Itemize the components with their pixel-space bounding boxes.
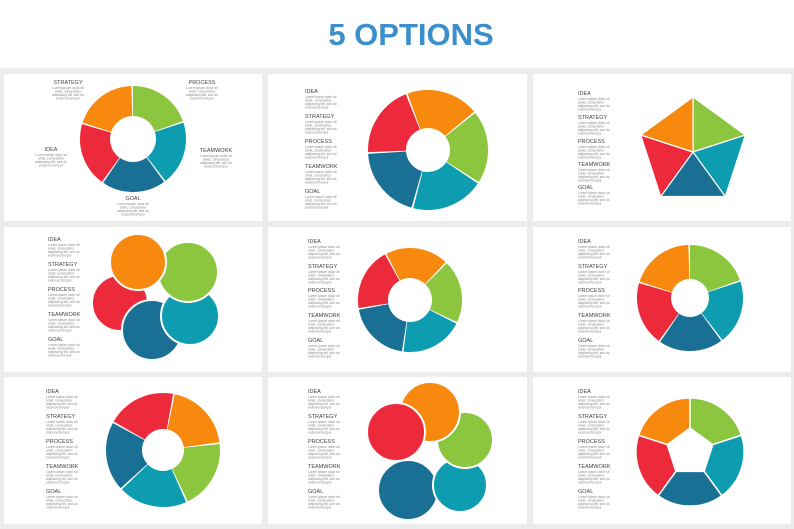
labels r3c2: Lorem ipsum dolor sit	[308, 395, 340, 399]
labels r2c1: Lorem ipsum dolor sit	[48, 318, 80, 322]
labels r3c2: adipiscing elit, sed do	[308, 402, 340, 406]
labels r1c2: eiusmod tempor	[305, 130, 330, 134]
labels r3c2	[308, 389, 341, 510]
labels r1c1: eiusmod tempor	[190, 96, 215, 100]
labels r1c3: Lorem ipsum dolor sit	[578, 145, 610, 149]
labels r1c2: Lorem ipsum dolor sit	[305, 145, 337, 149]
labels r2c1: eiusmod tempor	[48, 354, 73, 358]
labels r3c3: adipiscing elit, sed do	[578, 452, 610, 456]
labels r3c3: GOAL	[578, 489, 593, 495]
labels r3c2: IDEA	[308, 389, 321, 395]
labels r1c2: Lorem ipsum dolor sit	[305, 195, 337, 199]
labels r1c1	[35, 80, 233, 216]
labels r1c3: GOAL	[578, 185, 593, 191]
labels r2c2: eiusmod tempor	[308, 354, 333, 358]
labels r2c3: eiusmod tempor	[578, 304, 603, 308]
labels r1c1: Lorem ipsum dolor sit	[186, 86, 218, 90]
labels r2c1: amet, consectetur	[48, 296, 75, 300]
labels r3c1: eiusmod tempor	[46, 456, 71, 460]
labels r2c2: eiusmod tempor	[308, 280, 333, 284]
labels r3c1: amet, consectetur	[46, 398, 73, 402]
labels r3c3: TEAMWORK	[578, 464, 611, 470]
labels r3c2: adipiscing elit, sed do	[308, 502, 340, 506]
labels r2c3: IDEA	[578, 239, 591, 245]
labels r3c3: eiusmod tempor	[578, 406, 603, 410]
labels r2c1: eiusmod tempor	[48, 254, 73, 258]
labels r1c2: amet, consectetur	[305, 124, 332, 128]
labels r2c3: TEAMWORK	[578, 313, 611, 319]
labels r1c3: amet, consectetur	[578, 148, 605, 152]
labels r2c2: amet, consectetur	[308, 298, 335, 302]
labels r1c3: STRATEGY	[578, 115, 608, 121]
labels r3c1: eiusmod tempor	[46, 480, 71, 484]
labels r2c3: PROCESS	[578, 288, 605, 294]
labels r3c1: PROCESS	[46, 439, 73, 445]
labels r3c2: eiusmod tempor	[308, 430, 333, 434]
labels r2c3: adipiscing elit, sed do	[578, 326, 610, 330]
labels r2c3: eiusmod tempor	[578, 354, 603, 358]
labels r2c1: amet, consectetur	[48, 346, 75, 350]
labels r2c3: amet, consectetur	[578, 322, 605, 326]
panel: r2c1	[4, 227, 262, 372]
labels r1c2: eiusmod tempor	[305, 180, 330, 184]
labels r1c3: eiusmod tempor	[578, 156, 603, 160]
labels r3c2: amet, consectetur	[308, 448, 335, 452]
labels r1c2: adipiscing elit, sed do	[305, 152, 337, 156]
labels r3c2: Lorem ipsum dolor sit	[308, 420, 340, 424]
labels r3c2: eiusmod tempor	[308, 506, 333, 510]
labels r1c1: PROCESS	[189, 80, 216, 86]
labels r1c2	[305, 89, 338, 210]
labels r1c3: adipiscing elit, sed do	[578, 128, 610, 132]
labels r3c1: Lorem ipsum dolor sit	[46, 445, 78, 449]
labels r3c3: adipiscing elit, sed do	[578, 502, 610, 506]
labels r2c1: eiusmod tempor	[48, 328, 73, 332]
spiral donut r3c1	[108, 395, 218, 505]
labels r1c2: amet, consectetur	[305, 198, 332, 202]
labels r3c3: adipiscing elit, sed do	[578, 477, 610, 481]
labels r3c1: eiusmod tempor	[46, 506, 71, 510]
labels r1c3: IDEA	[578, 91, 591, 97]
labels r1c3: amet, consectetur	[578, 124, 605, 128]
labels r3c3: eiusmod tempor	[578, 430, 603, 434]
labels r3c2: amet, consectetur	[308, 398, 335, 402]
labels r2c2: TEAMWORK	[308, 313, 341, 319]
labels r3c2: Lorem ipsum dolor sit	[308, 445, 340, 449]
labels r1c1: Lorem ipsum dolor sit	[35, 153, 67, 157]
pie chart r1c2	[370, 92, 486, 208]
labels r3c2: adipiscing elit, sed do	[308, 477, 340, 481]
labels r2c2: eiusmod tempor	[308, 256, 333, 260]
pentagon chart r1c3	[641, 97, 745, 196]
labels r1c2: Lorem ipsum dolor sit	[305, 170, 337, 174]
labels r1c2: amet, consectetur	[305, 174, 332, 178]
labels r1c2: adipiscing elit, sed do	[305, 102, 337, 106]
labels r1c3: Lorem ipsum dolor sit	[578, 191, 610, 195]
labels r1c3: Lorem ipsum dolor sit	[578, 168, 610, 172]
labels r1c2: amet, consectetur	[305, 98, 332, 102]
labels r3c1: eiusmod tempor	[46, 406, 71, 410]
labels r1c1: eiusmod tempor	[56, 96, 81, 100]
labels r1c2: GOAL	[305, 189, 320, 195]
labels r2c2: amet, consectetur	[308, 348, 335, 352]
labels r2c3: Lorem ipsum dolor sit	[578, 245, 610, 249]
labels r3c1: adipiscing elit, sed do	[46, 452, 78, 456]
labels r1c2: PROCESS	[305, 139, 332, 145]
labels r3c2: adipiscing elit, sed do	[308, 452, 340, 456]
labels r3c3: amet, consectetur	[578, 424, 605, 428]
labels r1c2: TEAMWORK	[305, 164, 338, 170]
labels r3c3: amet, consectetur	[578, 398, 605, 402]
labels r2c1: eiusmod tempor	[48, 304, 73, 308]
labels r2c2	[308, 239, 341, 358]
labels r3c3: Lorem ipsum dolor sit	[578, 445, 610, 449]
labels r1c1: amet, consectetur	[203, 158, 230, 162]
labels r1c1: eiusmod tempor	[204, 164, 229, 168]
panel: r3c3	[533, 377, 791, 524]
labels r3c3: adipiscing elit, sed do	[578, 427, 610, 431]
labels r3c2: TEAMWORK	[308, 464, 341, 470]
panel: r3c1	[4, 377, 262, 524]
labels r1c3: eiusmod tempor	[578, 132, 603, 136]
labels r2c1	[48, 237, 81, 358]
panel: r1c2	[268, 74, 527, 221]
labels r1c2: amet, consectetur	[305, 148, 332, 152]
labels r1c3: adipiscing elit, sed do	[578, 152, 610, 156]
labels r2c3: amet, consectetur	[578, 298, 605, 302]
labels r1c1: amet, consectetur	[189, 90, 216, 94]
labels r2c2: adipiscing elit, sed do	[308, 326, 340, 330]
panel: r1c1	[4, 74, 262, 221]
labels r2c3: eiusmod tempor	[578, 280, 603, 284]
labels r3c3	[578, 389, 611, 510]
labels r1c1: adipiscing elit, sed do	[117, 209, 149, 213]
labels r1c1: adipiscing elit, sed do	[35, 160, 67, 164]
petal chart r3c2	[367, 382, 493, 520]
labels r3c1: GOAL	[46, 489, 61, 495]
labels r2c2: Lorem ipsum dolor sit	[308, 294, 340, 298]
labels r1c3: eiusmod tempor	[578, 108, 603, 112]
labels r3c1: eiusmod tempor	[46, 430, 71, 434]
labels r2c3: GOAL	[578, 338, 593, 344]
labels r2c3: Lorem ipsum dolor sit	[578, 294, 610, 298]
labels r2c2: IDEA	[308, 239, 321, 245]
labels r2c2: eiusmod tempor	[308, 304, 333, 308]
labels r1c1: Lorem ipsum dolor sit	[200, 154, 232, 158]
labels r3c3: Lorem ipsum dolor sit	[578, 395, 610, 399]
labels r3c1: amet, consectetur	[46, 424, 73, 428]
labels r2c2: Lorem ipsum dolor sit	[308, 245, 340, 249]
labels r1c3: amet, consectetur	[578, 100, 605, 104]
labels r1c3: TEAMWORK	[578, 162, 611, 168]
labels r2c1: adipiscing elit, sed do	[48, 350, 80, 354]
labels r3c3: adipiscing elit, sed do	[578, 402, 610, 406]
labels r3c2: STRATEGY	[308, 414, 338, 420]
labels r3c2: Lorem ipsum dolor sit	[308, 495, 340, 499]
labels r2c3: Lorem ipsum dolor sit	[578, 319, 610, 323]
labels r2c2: adipiscing elit, sed do	[308, 252, 340, 256]
panel: r2c3	[533, 227, 791, 372]
labels r3c1: Lorem ipsum dolor sit	[46, 495, 78, 499]
labels r1c1: adipiscing elit, sed do	[52, 93, 84, 97]
labels r1c2: adipiscing elit, sed do	[305, 177, 337, 181]
panel: r2c2	[268, 227, 527, 372]
labels r3c2: eiusmod tempor	[308, 480, 333, 484]
labels r3c1: Lorem ipsum dolor sit	[46, 470, 78, 474]
labels r1c2: adipiscing elit, sed do	[305, 127, 337, 131]
title: 5 OPTIONS	[328, 17, 494, 52]
labels r2c3: Lorem ipsum dolor sit	[578, 270, 610, 274]
labels r2c2: amet, consectetur	[308, 274, 335, 278]
labels r1c2: eiusmod tempor	[305, 106, 330, 110]
labels r1c3: eiusmod tempor	[578, 178, 603, 182]
labels r1c2: IDEA	[305, 89, 318, 95]
labels r3c3: PROCESS	[578, 439, 605, 445]
labels r3c2: amet, consectetur	[308, 474, 335, 478]
labels r1c1: amet, consectetur	[120, 206, 147, 210]
labels r1c3: Lorem ipsum dolor sit	[578, 97, 610, 101]
labels r2c2: amet, consectetur	[308, 322, 335, 326]
labels r3c1: Lorem ipsum dolor sit	[46, 420, 78, 424]
labels r3c1: TEAMWORK	[46, 464, 79, 470]
labels r1c1: STRATEGY	[53, 80, 83, 86]
labels r2c2: eiusmod tempor	[308, 330, 333, 334]
labels r2c3: adipiscing elit, sed do	[578, 277, 610, 281]
labels r1c2: STRATEGY	[305, 114, 335, 120]
labels r3c3: eiusmod tempor	[578, 456, 603, 460]
labels r1c3: amet, consectetur	[578, 172, 605, 176]
labels r3c3: eiusmod tempor	[578, 480, 603, 484]
labels r2c1: PROCESS	[48, 287, 75, 293]
labels r3c2: adipiscing elit, sed do	[308, 427, 340, 431]
petal chart r2c1	[92, 234, 219, 360]
labels r3c2: eiusmod tempor	[308, 456, 333, 460]
labels r3c3: Lorem ipsum dolor sit	[578, 420, 610, 424]
labels r2c1: adipiscing elit, sed do	[48, 250, 80, 254]
labels r3c3: amet, consectetur	[578, 474, 605, 478]
labels r1c3: amet, consectetur	[578, 194, 605, 198]
labels r2c3: eiusmod tempor	[578, 330, 603, 334]
labels r3c2: eiusmod tempor	[308, 406, 333, 410]
labels r1c3: adipiscing elit, sed do	[578, 104, 610, 108]
labels r3c2: Lorem ipsum dolor sit	[308, 470, 340, 474]
labels r2c1: GOAL	[48, 337, 63, 343]
labels r1c1: adipiscing elit, sed do	[186, 93, 218, 97]
labels r2c1: amet, consectetur	[48, 246, 75, 250]
labels r3c3: amet, consectetur	[578, 448, 605, 452]
labels r2c3: STRATEGY	[578, 264, 608, 270]
labels r2c1: adipiscing elit, sed do	[48, 325, 80, 329]
labels r2c3: amet, consectetur	[578, 248, 605, 252]
labels r1c1: GOAL	[125, 196, 141, 202]
labels r1c1: eiusmod tempor	[39, 164, 64, 168]
labels r2c3: eiusmod tempor	[578, 256, 603, 260]
panel: r3c2	[268, 377, 527, 524]
labels r1c2: adipiscing elit, sed do	[305, 202, 337, 206]
panel: r1c3	[533, 74, 791, 221]
labels r1c1: TEAMWORK	[200, 148, 233, 154]
labels r3c1: Lorem ipsum dolor sit	[46, 395, 78, 399]
labels r1c2: eiusmod tempor	[305, 206, 330, 210]
labels r2c1: eiusmod tempor	[48, 278, 73, 282]
labels r1c1: eiusmod tempor	[121, 212, 146, 216]
labels r2c2: GOAL	[308, 338, 323, 344]
labels r3c2: GOAL	[308, 489, 323, 495]
labels r2c1: IDEA	[48, 237, 61, 243]
labels r3c1: adipiscing elit, sed do	[46, 502, 78, 506]
labels r3c3: Lorem ipsum dolor sit	[578, 470, 610, 474]
labels r2c1: Lorem ipsum dolor sit	[48, 243, 80, 247]
donut chart r1c1	[80, 86, 186, 192]
labels r1c3: adipiscing elit, sed do	[578, 198, 610, 202]
labels r3c1: adipiscing elit, sed do	[46, 477, 78, 481]
labels r2c2: adipiscing elit, sed do	[308, 301, 340, 305]
labels r1c1: Lorem ipsum dolor sit	[117, 202, 149, 206]
labels r1c1: adipiscing elit, sed do	[200, 161, 232, 165]
labels r2c2: amet, consectetur	[308, 248, 335, 252]
labels r2c3: adipiscing elit, sed do	[578, 351, 610, 355]
labels r1c1: amet, consectetur	[55, 90, 82, 94]
labels r1c2: eiusmod tempor	[305, 156, 330, 160]
labels r1c1: amet, consectetur	[38, 156, 65, 160]
labels r1c1: Lorem ipsum dolor sit	[52, 86, 84, 90]
swirl donut r2c2	[358, 248, 462, 352]
labels r2c2: PROCESS	[308, 288, 335, 294]
labels r2c1: STRATEGY	[48, 262, 78, 268]
labels r3c1: STRATEGY	[46, 414, 76, 420]
labels r1c2: Lorem ipsum dolor sit	[305, 120, 337, 124]
labels r3c1: amet, consectetur	[46, 448, 73, 452]
labels r2c3: amet, consectetur	[578, 348, 605, 352]
labels r3c3: Lorem ipsum dolor sit	[578, 495, 610, 499]
donut r2c3	[640, 248, 740, 348]
labels r1c3: adipiscing elit, sed do	[578, 175, 610, 179]
labels r2c2: STRATEGY	[308, 264, 338, 270]
labels r1c3: PROCESS	[578, 139, 605, 145]
labels r1c2: Lorem ipsum dolor sit	[305, 95, 337, 99]
labels r3c1: IDEA	[46, 389, 59, 395]
labels r3c3: IDEA	[578, 389, 591, 395]
labels r1c3: eiusmod tempor	[578, 202, 603, 206]
labels r2c1: adipiscing elit, sed do	[48, 275, 80, 279]
labels r3c1: adipiscing elit, sed do	[46, 402, 78, 406]
labels r2c1: Lorem ipsum dolor sit	[48, 343, 80, 347]
labels r1c3: Lorem ipsum dolor sit	[578, 121, 610, 125]
labels r2c2: Lorem ipsum dolor sit	[308, 270, 340, 274]
labels r2c3: adipiscing elit, sed do	[578, 301, 610, 305]
labels r3c1: adipiscing elit, sed do	[46, 427, 78, 431]
labels r2c2: adipiscing elit, sed do	[308, 351, 340, 355]
labels r3c1	[46, 389, 79, 510]
labels r2c1: TEAMWORK	[48, 312, 81, 318]
labels r2c2: Lorem ipsum dolor sit	[308, 319, 340, 323]
labels r3c3: amet, consectetur	[578, 498, 605, 502]
labels r3c1: amet, consectetur	[46, 498, 73, 502]
labels r3c2: amet, consectetur	[308, 498, 335, 502]
labels r2c3: Lorem ipsum dolor sit	[578, 344, 610, 348]
labels r3c1: amet, consectetur	[46, 474, 73, 478]
labels r2c1: Lorem ipsum dolor sit	[48, 268, 80, 272]
labels r2c3	[578, 239, 611, 358]
labels r2c3: adipiscing elit, sed do	[578, 252, 610, 256]
labels r2c3: amet, consectetur	[578, 274, 605, 278]
labels r2c2: Lorem ipsum dolor sit	[308, 344, 340, 348]
labels r3c2: PROCESS	[308, 439, 335, 445]
labels r2c1: adipiscing elit, sed do	[48, 300, 80, 304]
labels r1c3	[578, 91, 611, 206]
labels r3c2: amet, consectetur	[308, 424, 335, 428]
labels r3c3: eiusmod tempor	[578, 506, 603, 510]
labels r2c2: adipiscing elit, sed do	[308, 277, 340, 281]
donut with pentagon hole r3c3	[636, 398, 744, 506]
labels r3c3: STRATEGY	[578, 414, 608, 420]
labels r1c1: IDEA	[45, 147, 58, 153]
labels r2c1: amet, consectetur	[48, 272, 75, 276]
labels r2c1: Lorem ipsum dolor sit	[48, 293, 80, 297]
labels r2c1: amet, consectetur	[48, 322, 75, 326]
